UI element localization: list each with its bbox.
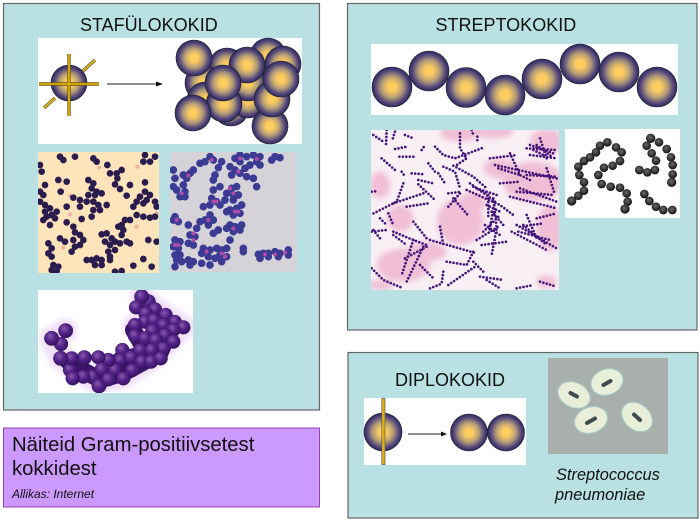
panel: stafülokokid — [4, 4, 320, 410]
icon: grape-like cluster of cocci — [175, 38, 301, 144]
diagram: staphylococcus division — [38, 38, 302, 144]
arrow — [408, 432, 447, 436]
heading: diplokokid: DIPLOKOKID — [395, 370, 505, 390]
heading: streptokokid: STREPTOKOKID — [436, 15, 576, 35]
micrograph: streptococci chains on pink tissue — [367, 125, 563, 290]
diagram: chain of cocci — [371, 44, 678, 115]
species caption: pneumoniae — [554, 486, 645, 504]
panel: streptokokid — [348, 4, 697, 330]
title: Näiteid Gram-positiivsetest — [12, 434, 255, 456]
species caption: Streptococcus — [556, 466, 660, 484]
panel: diplokokid — [348, 352, 698, 518]
panel: title box — [4, 428, 320, 507]
arrow — [107, 82, 163, 86]
source note: Allikas: Internet — [11, 487, 95, 501]
heading: stafülokokid: STAFÜLOKOKID — [80, 15, 218, 35]
icon: dividing coccus — [364, 398, 402, 464]
micrograph: staphylococci on grey background — [170, 152, 297, 272]
illustration: black-and-white streptococci chains — [565, 129, 680, 218]
icon: dividing coccus with planes — [39, 54, 99, 116]
diagram: diplococcus division — [364, 398, 526, 465]
illustration: purple staphylococcus cluster — [38, 289, 193, 393]
micrograph: staphylococci on yellow background — [38, 152, 159, 273]
title: kokkidest — [12, 458, 97, 480]
micrograph: encapsulated diplococci — [548, 358, 668, 454]
icon: pair of cocci — [450, 414, 524, 451]
